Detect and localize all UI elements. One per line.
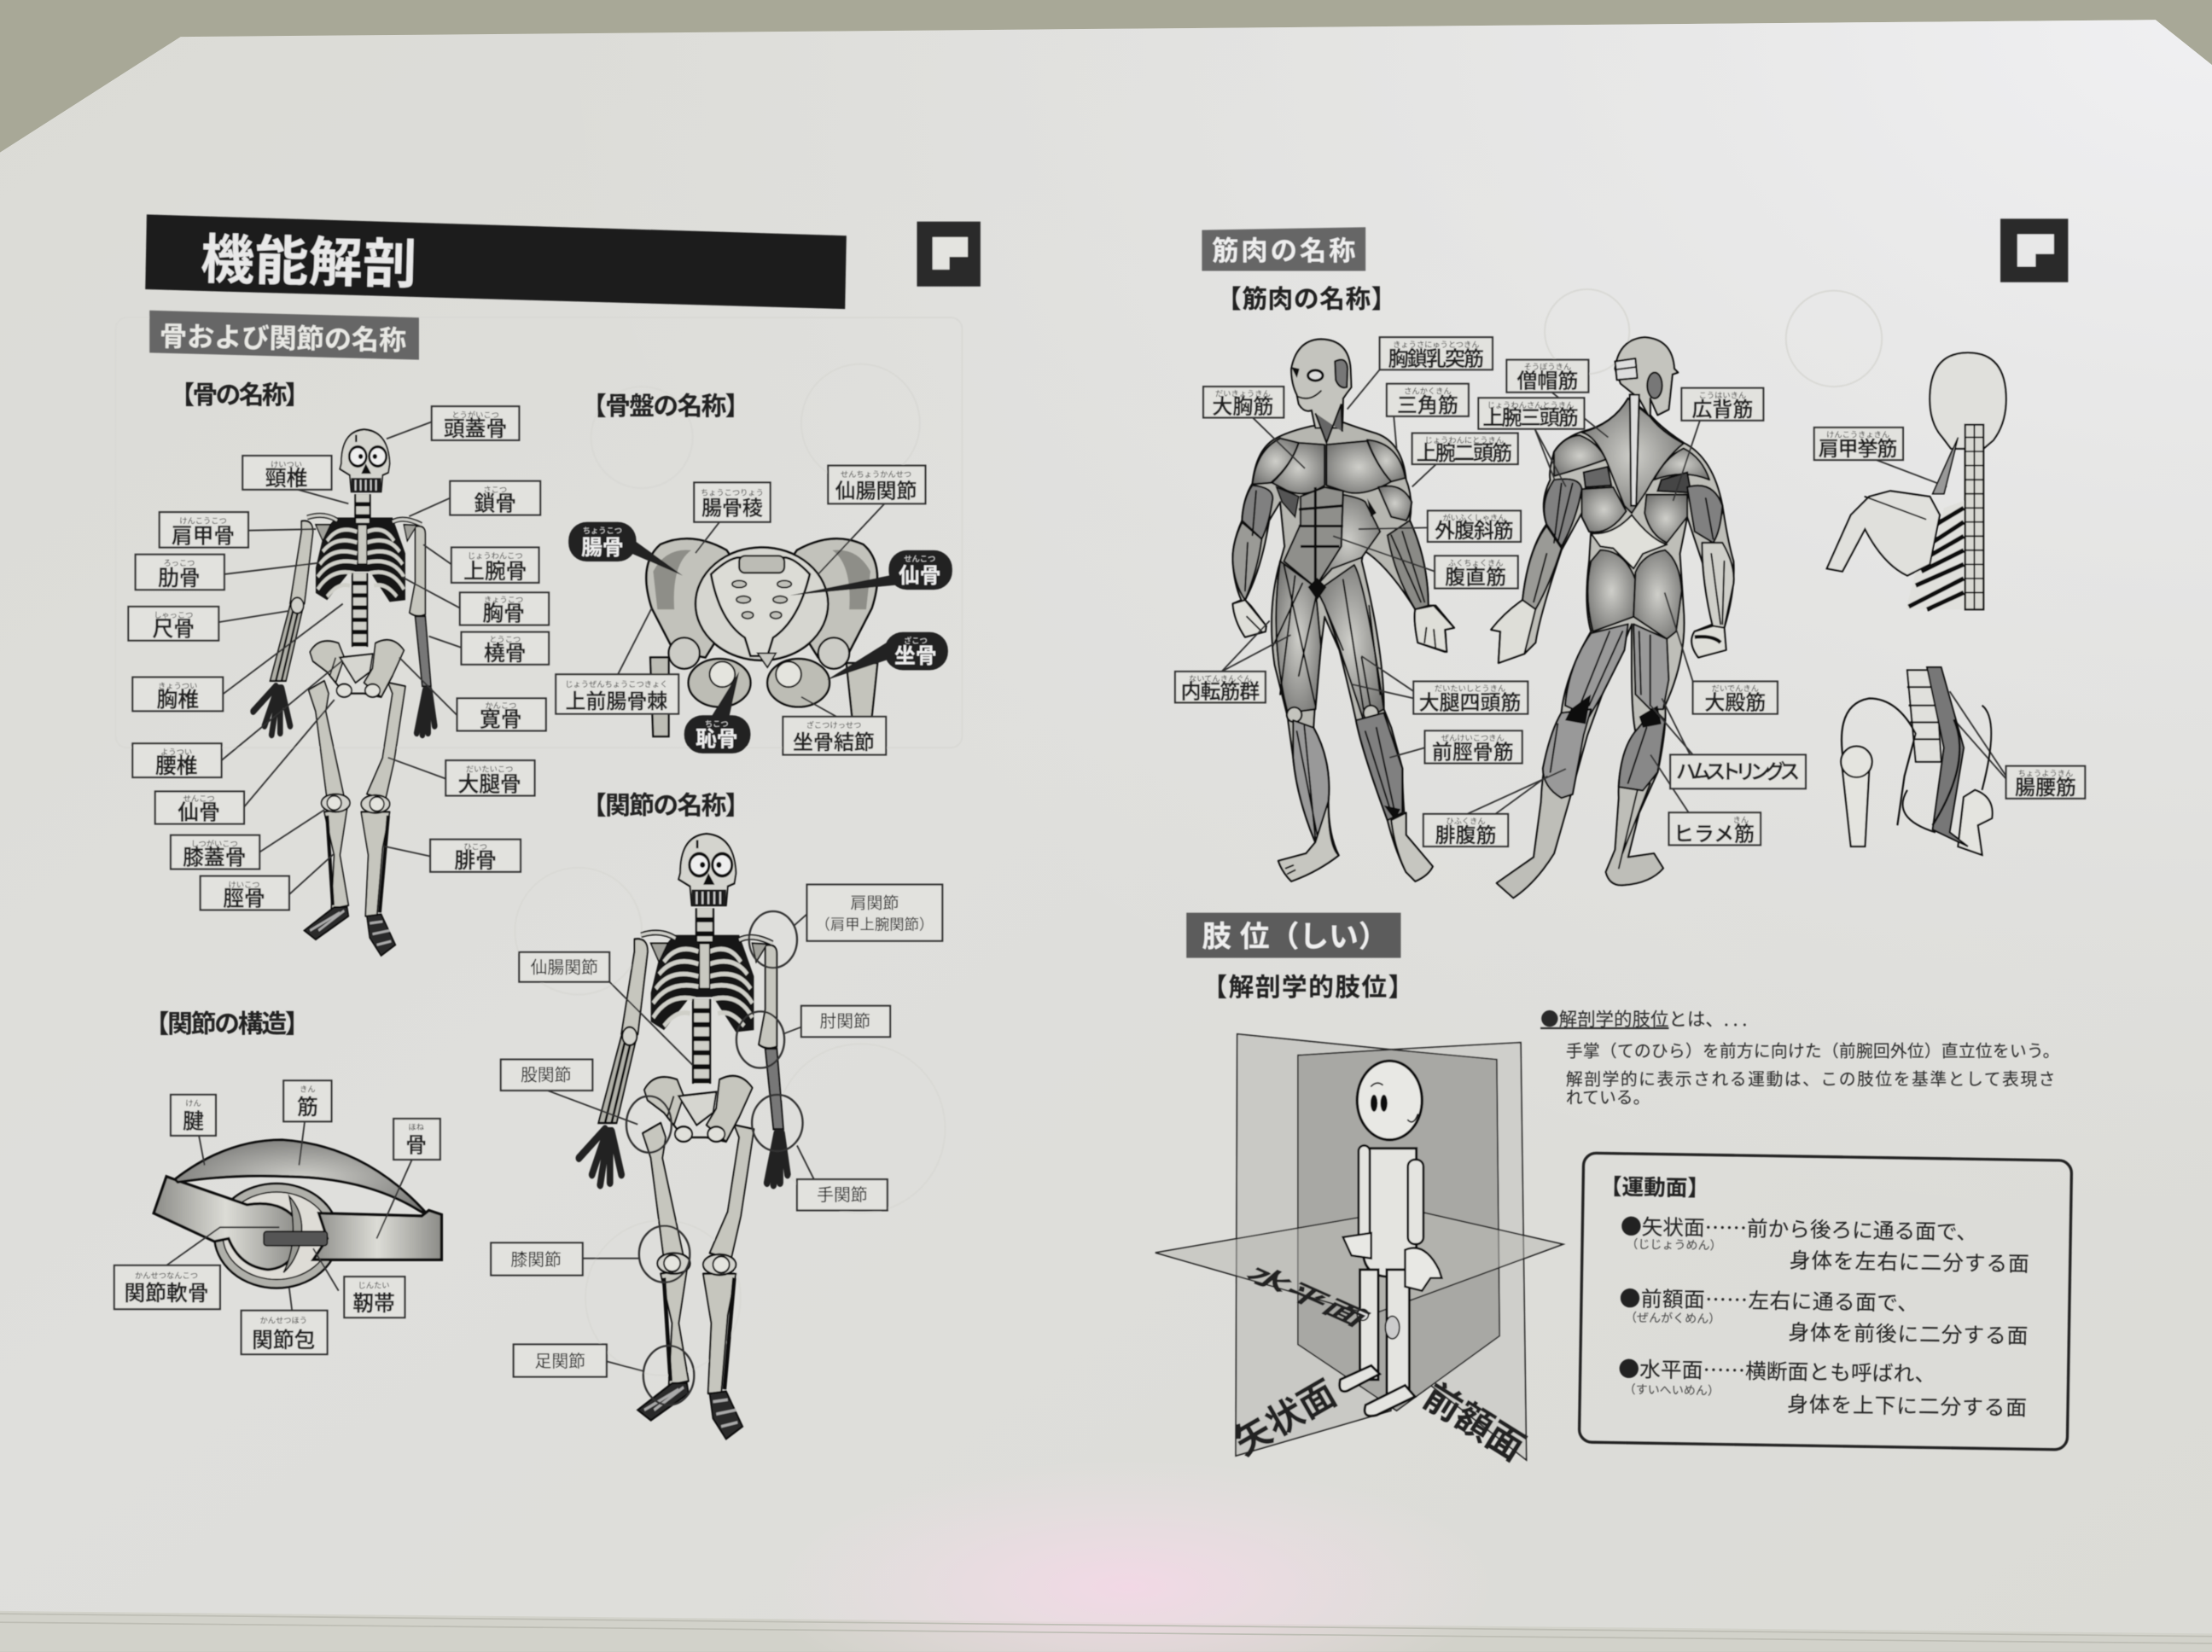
label: 膝関節: 膝関節 bbox=[510, 1251, 562, 1270]
label: 大腿四頭筋: 大腿四頭筋 bbox=[1419, 692, 1521, 715]
label: 頸椎: 頸椎 bbox=[265, 467, 307, 491]
label: 上前腸骨棘: 上前腸骨棘 bbox=[565, 690, 667, 713]
label: 膝蓋骨: しつがいこつ bbox=[191, 839, 238, 848]
label: 腓腹筋: 腓腹筋 bbox=[1435, 824, 1496, 847]
panel heading: 【運動面】 bbox=[1600, 1174, 1709, 1201]
label: ヒラメ筋 bbox=[1669, 812, 1761, 846]
label: 関節軟骨: 関節軟骨 bbox=[124, 1282, 209, 1306]
label: 筋 bbox=[283, 1080, 331, 1121]
diagram: anatomical planes bbox=[1155, 1034, 1563, 1469]
label: 寛骨: かんこつ bbox=[485, 701, 516, 710]
label: 膝蓋骨 bbox=[171, 835, 259, 870]
label: 脛骨 bbox=[201, 876, 289, 910]
label: 腓腹筋: ひふくきん bbox=[1446, 817, 1486, 826]
label: 上腕三頭筋: じょうわんさんとうきん bbox=[1487, 401, 1574, 410]
label: 腸腰筋: ちょうようきん bbox=[2018, 769, 2073, 777]
glutes bbox=[1588, 550, 1635, 631]
transverse plane text: ●水平面……横断面とも呼ばれ、 bbox=[1618, 1352, 1936, 1388]
label: 腸骨 black bbox=[568, 522, 637, 561]
label: 仙骨: せんこつ bbox=[183, 794, 215, 803]
label: 頭蓋骨: とうがいこつ bbox=[451, 410, 499, 419]
frontal plane text: 身体を前後に二分する面 bbox=[1788, 1316, 2029, 1350]
label: 外腹斜筋: 外腹斜筋 bbox=[1435, 520, 1514, 543]
label: 腸骨 black: ちょうこつ bbox=[583, 526, 622, 535]
label: 腓腹筋 bbox=[1423, 814, 1508, 847]
label: 関節軟骨: かんせつなんこつ bbox=[135, 1271, 198, 1280]
frontal plane text: （ぜんがくめん） bbox=[1625, 1311, 1720, 1325]
section heading: bones and joints bbox=[149, 311, 419, 360]
label: 肩甲挙筋: けんこうきょきん bbox=[1826, 431, 1889, 439]
leader lines: joint structure bbox=[166, 1121, 412, 1311]
label: 靭帯: 靭帯 bbox=[352, 1292, 395, 1316]
label: 前脛骨筋 bbox=[1425, 730, 1522, 764]
label: 足関節: 足関節 bbox=[535, 1352, 585, 1371]
label: 大胸筋: 大胸筋 bbox=[1212, 395, 1273, 418]
leader lines: pelvis bbox=[618, 503, 884, 717]
label: 肋骨: ろっこつ bbox=[163, 559, 195, 567]
skeleton: bone names bbox=[253, 429, 434, 956]
sagittal plane text: ●矢状面……前から後ろに通る面で、 bbox=[1621, 1210, 1977, 1247]
label: 広背筋: こうはいきん bbox=[1699, 391, 1746, 399]
transverse plane text bbox=[1618, 1352, 2028, 1422]
label: 三角筋 bbox=[1387, 384, 1469, 417]
label: 腱: 腱 bbox=[183, 1110, 204, 1134]
label: 肋骨: 肋骨 bbox=[158, 567, 201, 590]
diagram: iliopsoas bbox=[1841, 667, 1993, 855]
label: 恥骨 black: 恥骨 bbox=[696, 728, 738, 752]
label: 肋骨 bbox=[136, 555, 224, 590]
label: 胸椎: 胸椎 bbox=[157, 688, 199, 712]
label: 腸骨 black: 腸骨 bbox=[581, 537, 624, 560]
label: 橈骨: とうこつ bbox=[489, 635, 521, 643]
transverse plane text: （すいへいめん） bbox=[1623, 1382, 1720, 1398]
label: 腹直筋: ふくちょくきん bbox=[1448, 559, 1503, 567]
label: 大胸筋: だいきょうきん bbox=[1215, 390, 1271, 398]
label: 胸椎 bbox=[132, 678, 223, 712]
label: 前脛骨筋: ぜんけいこつきん bbox=[1441, 734, 1505, 742]
figure: front muscles bbox=[1233, 340, 1454, 881]
label: 肘関節 bbox=[801, 1006, 890, 1037]
deltoids bbox=[1554, 435, 1606, 476]
label: 肩関節: 肩関節 bbox=[850, 894, 899, 913]
heading: pelvis names: 【骨盤の名称】 bbox=[581, 393, 750, 421]
label: 腓骨: ひこつ bbox=[463, 842, 487, 851]
skeleton: joint names bbox=[579, 834, 788, 1439]
heading: joint names: 【関節の名称】 bbox=[581, 792, 750, 820]
joint circles bbox=[626, 911, 803, 1405]
label: 広背筋: 広背筋 bbox=[1691, 398, 1753, 422]
body silhouette bbox=[1491, 398, 1734, 898]
label: 膝蓋骨: 膝蓋骨 bbox=[183, 846, 246, 870]
plane name: 前額面: 前額面 bbox=[1417, 1376, 1531, 1469]
frontal plane text bbox=[1619, 1282, 2029, 1350]
label: 坐骨 black bbox=[884, 632, 948, 670]
panel: planes of motion bbox=[1579, 1153, 2072, 1450]
label: 内転筋群: 内転筋群 bbox=[1181, 680, 1260, 703]
label: 靭帯 bbox=[344, 1277, 405, 1318]
label: 鎖骨 bbox=[450, 481, 540, 516]
diagram: levator scapulae bbox=[1827, 352, 2006, 609]
label: 関節包: かんせつほう bbox=[260, 1317, 307, 1325]
label: 大殿筋: 大殿筋 bbox=[1704, 692, 1766, 715]
text: anatomical position description: ●解剖学的肢位とは、. . . bbox=[1540, 1005, 1747, 1032]
label: 寛骨: 寛骨 bbox=[480, 707, 522, 731]
heading: muscle names: 【筋肉の名称】 bbox=[1216, 286, 1397, 314]
label: 胸骨: きょうこつ bbox=[484, 596, 523, 604]
label: 坐骨結節: 坐骨結節 bbox=[793, 731, 875, 754]
label: 関節軟骨 bbox=[114, 1265, 220, 1309]
label: 腱: けん bbox=[185, 1099, 201, 1108]
label: 橈骨 bbox=[462, 632, 549, 666]
label: 上腕骨: 上腕骨 bbox=[463, 560, 527, 584]
label: 坐骨 black: ざこつ bbox=[904, 636, 928, 645]
text: anatomical position description: 手掌（てのひら）を前方に向けた（前腕回外位）直立位をいう。 bbox=[1566, 1037, 2059, 1062]
label: 上腕二頭筋 bbox=[1412, 433, 1518, 465]
label: 骨: ほね bbox=[408, 1123, 424, 1131]
title bar: 機能解剖 bbox=[200, 230, 417, 295]
label: 坐骨結節: ざこつけっせつ bbox=[806, 720, 861, 730]
label: 足関節 bbox=[514, 1345, 607, 1377]
label: 外腹斜筋 bbox=[1428, 511, 1521, 543]
label: 腸腰筋: 腸腰筋 bbox=[2015, 777, 2076, 800]
label: 僧帽筋: そうぼうきん bbox=[1524, 363, 1571, 371]
section heading: bones and joints: 骨および関節の名称 bbox=[160, 321, 407, 356]
label: 広背筋 bbox=[1681, 388, 1763, 422]
label: 鎖骨: さこつ bbox=[483, 486, 507, 494]
label: 股関節: 股関節 bbox=[521, 1066, 571, 1085]
label: 腸腰筋 bbox=[2006, 766, 2085, 800]
label: 仙腸関節: 仙腸関節 bbox=[835, 480, 917, 503]
label: ヒラメ筋: きん bbox=[1733, 816, 1749, 824]
label: 上腕二頭筋: じょうわんにとうきん bbox=[1425, 436, 1504, 445]
label: 恥骨 black: ちこつ bbox=[705, 719, 729, 728]
label: 肩甲挙筋: 肩甲挙筋 bbox=[1819, 438, 1897, 461]
label: 大腿骨 bbox=[445, 760, 535, 797]
arms bbox=[1544, 479, 1582, 546]
label: 大腿四頭筋: だいたいしとうきん bbox=[1435, 684, 1505, 693]
label: 上腕骨: じょうわんこつ bbox=[468, 552, 523, 561]
label: 腰椎: ようつい bbox=[160, 748, 192, 757]
label: 坐骨 black: 坐骨 bbox=[894, 644, 937, 668]
label: 内転筋群 bbox=[1175, 672, 1266, 703]
label: 筋: きん bbox=[300, 1085, 316, 1094]
label: 仙骨: 仙骨 bbox=[178, 801, 220, 825]
label: 三角筋: さんかくきん bbox=[1404, 387, 1452, 395]
label: 腹直筋: 腹直筋 bbox=[1445, 566, 1506, 589]
label: 胸骨: 胸骨 bbox=[482, 602, 525, 625]
label: 寛骨 bbox=[457, 698, 546, 731]
label: 大殿筋: だいでんきん bbox=[1712, 684, 1759, 693]
label: 膝関節 bbox=[491, 1242, 583, 1275]
label: 胸椎: きょうつい bbox=[158, 682, 197, 690]
label: 大腿四頭筋 bbox=[1413, 682, 1528, 715]
label: 靭帯: じんたい bbox=[358, 1281, 390, 1289]
sagittal plane text bbox=[1620, 1210, 2030, 1278]
text: anatomical position description: れている。 bbox=[1566, 1084, 1650, 1108]
abs and obliques bbox=[1284, 487, 1343, 587]
label: 三角筋: 三角筋 bbox=[1397, 394, 1458, 417]
hamstrings bbox=[1565, 624, 1628, 717]
lats bbox=[1582, 487, 1627, 532]
label: 骨 bbox=[393, 1119, 440, 1160]
label: 胸鎖乳突筋: きょうさにゅうとつきん bbox=[1393, 340, 1480, 349]
label: 僧帽筋: 僧帽筋 bbox=[1516, 370, 1578, 393]
label: 外腹斜筋: がいふくしゃきん bbox=[1442, 513, 1505, 522]
label: 腹直筋 bbox=[1435, 556, 1518, 589]
label: ハムストリングス bbox=[1670, 755, 1806, 788]
leader lines: joints bbox=[547, 914, 814, 1371]
arms bbox=[1378, 486, 1412, 521]
label: 腓骨 bbox=[430, 840, 521, 873]
label: 胸骨 bbox=[460, 592, 549, 625]
label: 肩関節 bbox=[807, 885, 942, 941]
title bar bbox=[145, 214, 847, 309]
label: 関節包: 関節包 bbox=[252, 1329, 315, 1352]
lower back bbox=[1591, 515, 1667, 568]
pelvis diagram bbox=[646, 538, 877, 736]
joint structure diagram bbox=[154, 1140, 441, 1288]
label: 腸骨稜 bbox=[694, 482, 771, 522]
label: 脛骨: 脛骨 bbox=[223, 887, 265, 910]
label: 股関節 bbox=[501, 1060, 592, 1091]
label: 恥骨 black bbox=[684, 715, 750, 753]
label: 骨: 骨 bbox=[405, 1135, 427, 1158]
icon: corner mark left bbox=[917, 222, 981, 287]
label: 腓骨: 腓骨 bbox=[454, 849, 497, 873]
label: 仙骨 black: 仙骨 bbox=[899, 564, 941, 588]
label: 鎖骨: 鎖骨 bbox=[474, 492, 516, 516]
sagittal plane text: 身体を左右に二分する面 bbox=[1790, 1244, 2029, 1278]
label: ヒラメ筋: ヒラメ筋 bbox=[1674, 823, 1755, 846]
paper edge lines bbox=[0, 1614, 2212, 1643]
section heading: limb position: 肢 位（しい） bbox=[1202, 920, 1388, 953]
label: 尺骨: 尺骨 bbox=[153, 619, 195, 642]
label: ハムストリングス: ハムストリングス bbox=[1676, 761, 1800, 784]
shoulders and chest bbox=[1253, 439, 1299, 484]
label: 尺骨 bbox=[128, 607, 218, 642]
label: 頭蓋骨: 頭蓋骨 bbox=[444, 417, 507, 441]
section heading: muscles bbox=[1202, 227, 1365, 271]
text: anatomical position description bbox=[1540, 1005, 2059, 1108]
feet bbox=[1278, 802, 1339, 881]
trapezius bbox=[1582, 398, 1684, 513]
label: 肩甲骨 bbox=[160, 512, 248, 549]
heading: bone names: 【骨の名称】 bbox=[169, 381, 311, 410]
label: 脛骨: けいこつ bbox=[228, 881, 259, 889]
label: 上前腸骨棘 bbox=[556, 674, 678, 714]
label: 坐骨結節 bbox=[783, 717, 886, 755]
label: 手関節: 手関節 bbox=[817, 1186, 868, 1205]
pointers: pelvis black labels bbox=[620, 535, 934, 722]
label: 腰椎: 腰椎 bbox=[155, 754, 197, 778]
label: 仙腸関節 (joint) bbox=[519, 952, 609, 982]
label: 上腕三頭筋: 上腕三頭筋 bbox=[1482, 407, 1579, 430]
label: 僧帽筋 bbox=[1506, 360, 1588, 393]
label: 尺骨: しゃっこつ bbox=[154, 611, 193, 620]
label: 大胸筋 bbox=[1203, 387, 1284, 418]
frontal plane text: ●前額面……左右に通る面で、 bbox=[1619, 1282, 1918, 1318]
sagittal plane text: （じじょうめん） bbox=[1626, 1237, 1722, 1252]
label: 仙腸関節 bbox=[828, 466, 925, 503]
paper stack bottom edges bbox=[0, 1603, 2212, 1652]
calves bbox=[1543, 709, 1591, 798]
label: 上前腸骨棘: じょうぜんちょうこつきょく bbox=[565, 680, 668, 689]
label: 腸骨稜: 腸骨稜 bbox=[701, 497, 763, 520]
plane name: 水平面: 水平面 bbox=[1239, 1261, 1376, 1331]
text: anatomical position description: 解剖学的に表示される運動は、この肢位を基準として表現さ bbox=[1566, 1065, 2056, 1090]
label: 関節包 bbox=[242, 1311, 328, 1354]
label: 胸鎖乳突筋: 胸鎖乳突筋 bbox=[1388, 347, 1484, 370]
label: 橈骨: 橈骨 bbox=[484, 642, 527, 666]
figure: back muscles bbox=[1491, 337, 1734, 898]
label: 胸鎖乳突筋 bbox=[1380, 337, 1493, 370]
label: 仙腸関節: せんちょうかんせつ bbox=[841, 470, 911, 479]
label: 腰椎 bbox=[132, 743, 222, 778]
leader lines: muscles bbox=[1222, 369, 2006, 814]
label: 上腕二頭筋: 上腕二頭筋 bbox=[1417, 442, 1512, 465]
hands bbox=[1233, 600, 1266, 637]
label: 内転筋群: ないてんきんぐん bbox=[1189, 675, 1252, 683]
label: 肩関節: （肩甲上腕関節） bbox=[816, 916, 934, 934]
label: 仙骨 bbox=[155, 792, 244, 825]
label: 肩甲挙筋 bbox=[1814, 428, 1903, 461]
label: 肘関節: 肘関節 bbox=[819, 1013, 870, 1032]
label: 肩甲骨: けんこうこつ bbox=[179, 516, 227, 525]
heading: anatomical position: 【解剖学的肢位】 bbox=[1202, 974, 1413, 1002]
label: 手関節 bbox=[797, 1179, 888, 1210]
label: 仙骨 black bbox=[888, 550, 952, 590]
label: 前脛骨筋: 前脛骨筋 bbox=[1432, 741, 1514, 764]
label: 頭蓋骨 bbox=[432, 406, 519, 441]
head bbox=[1291, 340, 1351, 428]
label: 大腿骨: 大腿骨 bbox=[457, 772, 521, 796]
transverse plane text: 身体を上下に二分する面 bbox=[1787, 1387, 2027, 1422]
thighs bbox=[1276, 561, 1321, 713]
label: 筋: 筋 bbox=[297, 1096, 318, 1120]
label: 頸椎: けいつい bbox=[271, 460, 302, 468]
icon: corner mark right bbox=[2000, 218, 2068, 282]
label: 大殿筋 bbox=[1693, 682, 1778, 715]
label: 大腿骨: だいたいこつ bbox=[466, 765, 513, 773]
head back bbox=[1615, 337, 1678, 419]
label: 肩甲骨: 肩甲骨 bbox=[172, 526, 235, 549]
pink glare bbox=[762, 1460, 1495, 1652]
label: 腸骨稜: ちょうこつりょう bbox=[701, 488, 764, 497]
label: 仙骨 black: せんこつ bbox=[904, 555, 935, 563]
body silhouette bbox=[1233, 422, 1454, 881]
label: 腱 bbox=[171, 1095, 216, 1136]
knees and lower legs bbox=[1287, 707, 1301, 722]
label: 仙腸関節 (joint): 仙腸関節 bbox=[531, 959, 598, 978]
label: 上腕三頭筋 bbox=[1478, 398, 1584, 430]
label: 頸椎 bbox=[242, 456, 331, 491]
label: 上腕骨 bbox=[451, 548, 538, 584]
show-through ghost figures bbox=[116, 289, 1882, 1376]
hands bbox=[1491, 600, 1535, 663]
leader lines: bones bbox=[218, 422, 462, 894]
plane name: 矢状面: 矢状面 bbox=[1228, 1373, 1343, 1463]
section heading: muscles: 筋肉の名称 bbox=[1212, 236, 1356, 265]
section heading: limb position bbox=[1186, 913, 1400, 958]
heading: joint structure: 【関節の構造】 bbox=[144, 1010, 311, 1038]
